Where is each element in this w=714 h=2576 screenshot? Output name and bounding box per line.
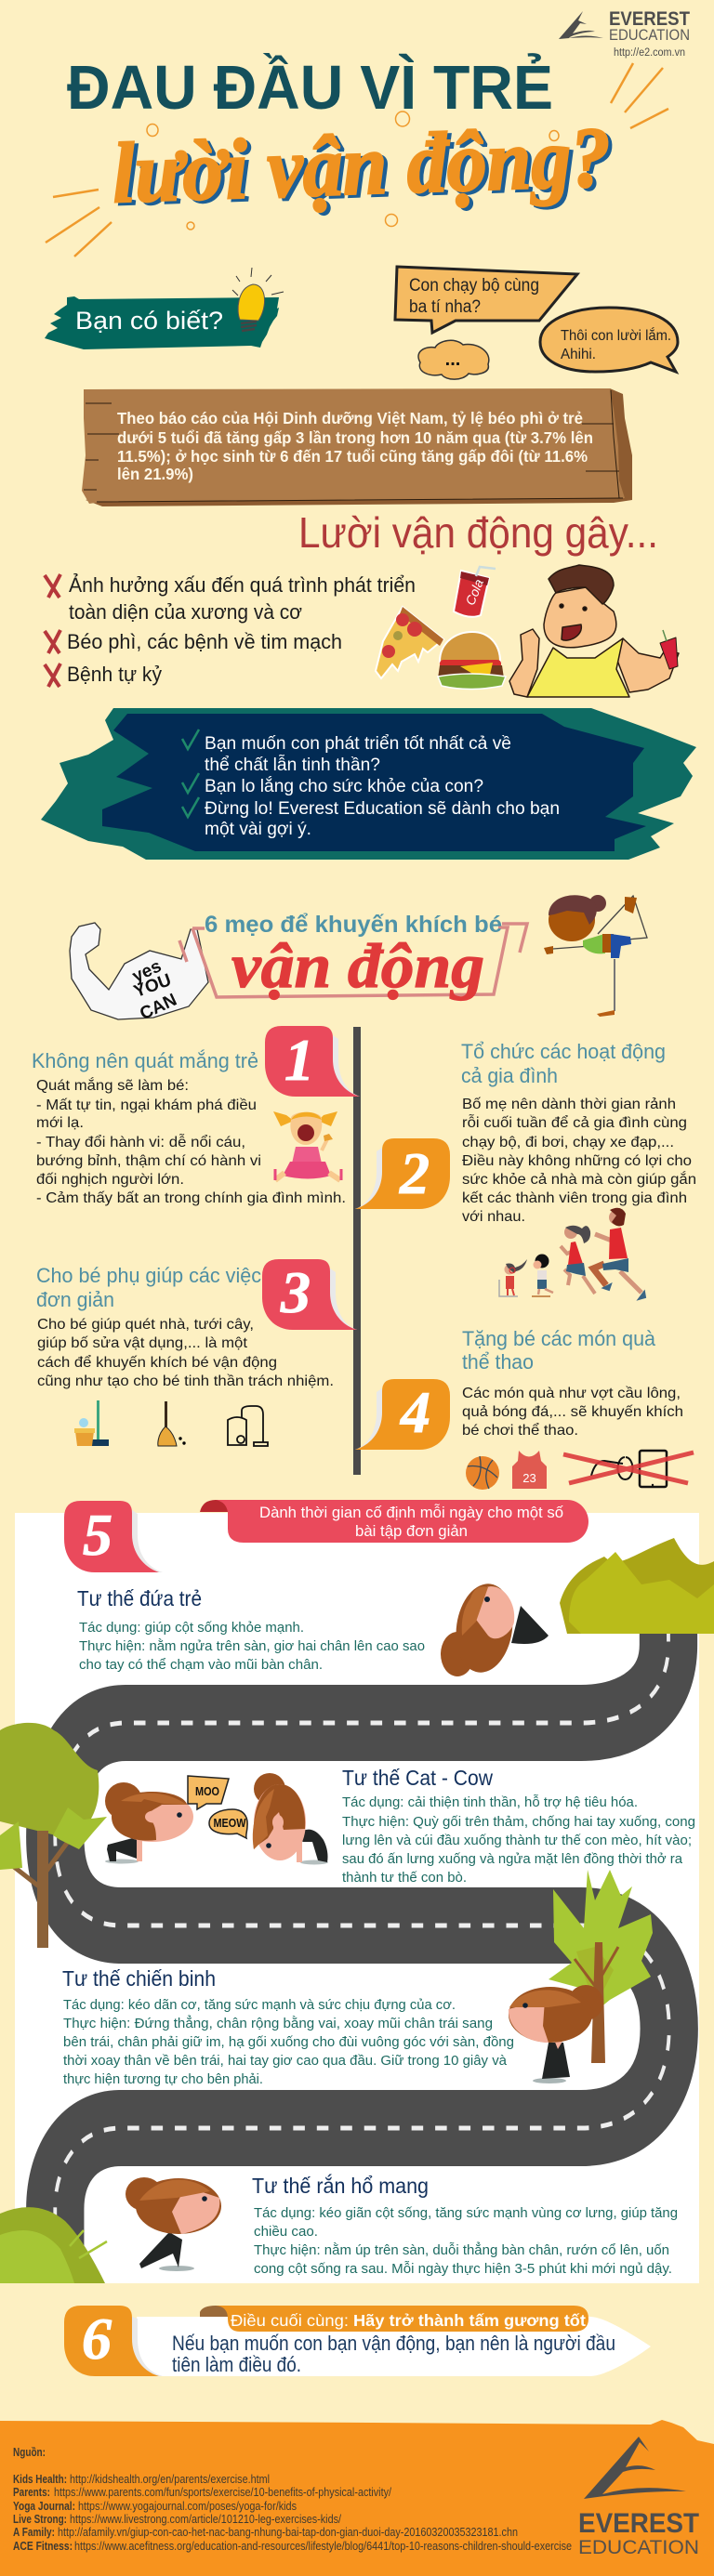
- footer: sources: Nguồn:: [13, 2445, 46, 2459]
- step 1: body text: - Mất tự tin, ngại khám phá điều: [36, 1097, 257, 1113]
- speech bubble: meow: MEOW: [214, 1816, 246, 1830]
- speech bubble: moo: MOO: [195, 1784, 219, 1798]
- step 6: banner: Điều cuối cùng:: [231, 2311, 349, 2330]
- pose 3: heading and text: Tác dụng: kéo dãn cơ, tăng sức mạnh và sức chịu đựng của cơ.: [63, 1997, 456, 2013]
- icon: light bulb: [232, 268, 284, 331]
- road: [55, 1626, 669, 2283]
- step 3: heading: đơn giản: [36, 1288, 114, 1311]
- step 4: heading: Tặng bé các món quà: [462, 1327, 656, 1350]
- step 6: banner: [200, 2306, 588, 2332]
- step 3: body text: cũng như tạo cho bé tinh thần trách nhiệm.: [37, 1373, 334, 1389]
- pose 1: heading and text: Tác dụng: giúp cột sống khỏe mạnh.: [79, 1620, 304, 1636]
- step 6: banner: Hãy trở thành tấm gương tốt: [353, 2311, 586, 2330]
- pose 1: heading and text: Tư thế đứa trẻ: [77, 1586, 202, 1610]
- logo: Everest Education footer: EVEREST: [578, 2508, 699, 2539]
- icon: jersey: [512, 1451, 547, 1489]
- pose 3: heading and text: thời xoay thân về bên trái, hai tay giơ cao qua đầu. Giữ trong 10 giây và: [63, 2053, 508, 2069]
- step 2: body text: với nhau.: [462, 1209, 525, 1225]
- logo: Everest Education footer: [578, 2437, 699, 2558]
- footer: sources: Live Strong:: [13, 2512, 67, 2526]
- icon: broom: [158, 1401, 186, 1446]
- pose 2: cow figure: [105, 1782, 193, 1864]
- pose 3: figure: [509, 1985, 603, 2083]
- speech bubble: lazy reply: Ahihi.: [561, 347, 596, 362]
- step 4: body text: Các món quà như vợt cầu lông,: [462, 1386, 681, 1401]
- list: consequences: Bệnh tự kỷ: [67, 663, 162, 686]
- panel: wooden sign: 11.5%); ở học sinh từ 6 đến 17 tuổi cũng tăng gấp đôi (từ 11.6%: [117, 447, 588, 466]
- step 3: body text: cách để khuyến khích bé vận động: [37, 1354, 277, 1371]
- panel: call-out brush with questions: một vài gợi ý.: [205, 820, 311, 839]
- step 4: badge: [355, 1379, 450, 1450]
- panel: wooden sign: lên 21.9%): [117, 465, 193, 483]
- panel: call-out brush with questions: thể chất lẫn tinh thần?: [205, 755, 380, 775]
- step 1: body text: Quát mắng sẽ làm bé:: [36, 1076, 189, 1094]
- footer: sources: http://afamily.vn/giup-con-cao-het-nac-bang-nhung-bai-tap-don-gian-duoi-day-20160320035323181.chn: [58, 2525, 518, 2539]
- step 5: badge: [64, 1501, 163, 1572]
- illustration: yoga girl: [544, 895, 647, 1017]
- step 1: badge: 1: [284, 1027, 314, 1093]
- step 2: body text: rỗi cuối tuần để cả gia đình cùng: [462, 1113, 687, 1131]
- footer: sources: A Family:: [13, 2525, 55, 2539]
- speech bubble: lazy reply: [540, 308, 678, 372]
- footer: sources: https://www.yogajournal.com/poses/yoga-for/kids: [78, 2499, 297, 2513]
- panel: wooden sign: Theo báo cáo của Hội Dinh dưỡng Việt Nam, tỷ lệ béo phì ở trẻ: [117, 409, 583, 427]
- pose 3: heading and text: Tư thế chiến binh: [62, 1966, 216, 1991]
- step 1: badge: [265, 1026, 360, 1097]
- step 5: banner: Dành thời gian cố định mỗi ngày cho một số: [259, 1504, 564, 1521]
- step 6: badge: [64, 2306, 163, 2376]
- step 6: body text: Nếu bạn muốn con bạn vận động, bạn nên là người đầu: [172, 2332, 615, 2355]
- step 3: body text: giúp bố sửa vật dụng,... là một: [37, 1335, 248, 1351]
- speech bubble: run with dad: Con chạy bộ cùng: [409, 276, 539, 296]
- title line two: script with shadow: lười vận động?: [115, 112, 616, 223]
- step 6: body text: [172, 2332, 615, 2376]
- illustration: crying girl: [273, 1111, 341, 1180]
- step 4: badge: 4: [400, 1379, 430, 1445]
- heading: laziness causes: Lười vận động gây...: [298, 508, 658, 557]
- pose 1: heading and text: Thực hiện: nằm ngửa trên sàn, giơ hai chân lên cao sao: [79, 1638, 425, 1654]
- step 3: body text: Cho bé giúp quét nhà, tưới cây,: [37, 1317, 254, 1333]
- title line two: script with shadow: lười vận động?: [111, 110, 613, 220]
- step 3: heading: Cho bé phụ giúp các việc: [36, 1264, 261, 1287]
- speech bubble: lazy reply: Thôi con lười lắm.: [561, 326, 671, 344]
- footer: sources: https://www.parents.com/fun/sports/exercise/10-benefits-of-physical-activity/: [54, 2485, 391, 2499]
- step 2: body text: kết các thành viên trong gia đình: [462, 1190, 687, 1206]
- title line one: ĐAU ĐẦU VÌ TRẺ: [67, 53, 553, 123]
- callout: did you know brush: [45, 296, 279, 349]
- logo: Everest Education header: http://e2.com.vn: [614, 47, 685, 59]
- step 4: body text: bé chơi thể thao.: [462, 1422, 578, 1439]
- list: consequences: Béo phì, các bệnh về tim mạch: [67, 630, 342, 653]
- logo: Everest Education header: EDUCATION: [609, 26, 690, 44]
- step 4: heading: thể thao: [462, 1350, 534, 1373]
- pose 1: figure: [441, 1580, 549, 1676]
- step 1: body text: bướng bỉnh, thậm chí có hành vi: [36, 1153, 261, 1169]
- step 2: badge: 2: [399, 1140, 430, 1206]
- step 2: heading: Tổ chức các hoạt động: [461, 1040, 666, 1063]
- icon: basketball: [466, 1456, 499, 1490]
- speech bubble: run with dad: ba tí nha?: [409, 297, 481, 317]
- pose 4: heading and text: Tư thế rắn hổ mang: [252, 2174, 429, 2198]
- panel: call-out brush with questions: Bạn lo lắng cho sức khỏe của con?: [205, 776, 483, 796]
- illustration: overweight man eating: [509, 565, 679, 697]
- footer: sources: [13, 2445, 572, 2553]
- thought cloud: ...: [445, 349, 460, 370]
- footer: sources: Kids Health:: [13, 2472, 67, 2486]
- pose 1: heading and text: cho tay có thể chạm vào mũi bàn chân.: [79, 1657, 323, 1673]
- speech bubble: moo: [188, 1776, 229, 1809]
- icon: cola can: Cola: [462, 577, 486, 608]
- icon: jersey: 23: [522, 1471, 536, 1485]
- step 1: body text: [36, 1076, 346, 1206]
- step 2: body text: Bố mẹ nên dành thời gian rảnh: [462, 1097, 676, 1112]
- footer: sources: Yoga Journal:: [13, 2499, 75, 2513]
- pose 2: cat figure: [253, 1773, 328, 1864]
- list: consequences: Ảnh hưởng xấu đến quá trình phát triển: [69, 573, 416, 597]
- pose 2: heading and text: Tư thế Cat - Cow: [342, 1766, 493, 1790]
- step 2: heading: [461, 1040, 666, 1087]
- heading: six tips frame: [179, 912, 527, 1001]
- step 5: badge: 5: [83, 1502, 112, 1568]
- step 5: banner: [200, 1500, 588, 1543]
- step 6: white arrow panel: [137, 2317, 651, 2376]
- speech bubble: run with dad: [395, 267, 577, 333]
- pose 2: heading and text: Thực hiện: Quỳ gối trên thảm, chống hai tay xuống, cong: [342, 1814, 695, 1830]
- panel: section 5 white background: [15, 1513, 699, 2283]
- pose 2: heading and text: sau đó ấn lưng xuống và ngửa mặt lên đồng thời thở ra: [342, 1851, 683, 1867]
- step 6: body text: tiên làm điều đó.: [172, 2353, 301, 2376]
- illustration: running family: [499, 1208, 645, 1299]
- pose 1: heading and text: [77, 1586, 425, 1673]
- pose 4: heading and text: [252, 2174, 678, 2277]
- step 5: banner: bài tập đơn giản: [355, 1522, 468, 1540]
- logo: Everest Education header: [559, 8, 690, 59]
- tree: bush top right: [560, 1538, 714, 1634]
- pose 4: heading and text: cong cột sống ra sau. Mỗi ngày thực hiện 3-5 phút khi mới ngủ dậy.: [254, 2261, 672, 2277]
- heading: six tips frame: vận động: [231, 930, 484, 1001]
- tree: middle right: [549, 1870, 653, 2063]
- step 1: body text: mới lạ.: [36, 1115, 84, 1131]
- panel: call-out brush with questions: Đừng lo! Everest Education sẽ dành cho bạn: [205, 799, 560, 819]
- step 4: body text: quả bóng đá,... sẽ khuyến khích: [462, 1404, 683, 1420]
- logo: Everest Education header: EVEREST: [609, 8, 690, 30]
- thought cloud: [418, 340, 489, 379]
- step 1: body text: đối nghịch người lớn.: [36, 1172, 184, 1188]
- step 6: badge: 6: [82, 2306, 112, 2372]
- panel: call-out brush with questions: [41, 708, 696, 860]
- step 2: body text: [462, 1097, 696, 1225]
- icon: cola can: [454, 567, 496, 617]
- speech bubble: meow: [209, 1809, 247, 1838]
- panel: wooden sign: [82, 388, 632, 506]
- illustration: yes you can arm: yes: [129, 956, 165, 987]
- tree: bottom left bush: [0, 2207, 107, 2283]
- step 1: body text: - Cảm thấy bất an trong chính gia đình mình.: [36, 1190, 346, 1206]
- pose 3: heading and text: [62, 1966, 514, 2087]
- list: consequences: toàn diện của xương và cơ: [69, 600, 302, 624]
- title decoration: rays and circles: [46, 63, 668, 256]
- step 2: body text: chạy bộ, đi bơi, chạy xe đạp,...: [462, 1135, 674, 1150]
- step 2: body text: Điều này không những có lợi cho: [462, 1153, 692, 1169]
- step 2: body text: sức khỏe cả nhà mà còn giúp gắn: [462, 1170, 696, 1188]
- panel: call-out brush with questions: Bạn muốn con phát triển tốt nhất cả về: [205, 734, 511, 754]
- step 3: badge: [262, 1259, 357, 1330]
- panel: wooden sign: dưới 5 tuổi đã tăng gấp 3 lần trong hơn 10 năm qua (từ 3.7% lên: [117, 428, 593, 447]
- footer: sources: http://kidshealth.org/en/parents/exercise.html: [70, 2472, 270, 2486]
- step 2: badge: [355, 1138, 450, 1209]
- step 1: heading: Không nên quát mắng trẻ: [32, 1049, 258, 1072]
- pose 4: heading and text: chiều cao.: [254, 2224, 318, 2240]
- icon: pizza slice: [376, 607, 443, 678]
- step 4: body text: [462, 1386, 683, 1439]
- step 3: heading: [36, 1264, 261, 1311]
- timeline bar: [353, 1027, 361, 1475]
- step 3: badge: 3: [280, 1259, 311, 1325]
- footer: sources: https://www.livestrong.com/article/101210-leg-exercises-kids/: [70, 2512, 341, 2526]
- footer: sources: https://www.acefitness.org/education-and-resources/lifestyle/blog/6441/top-10-reasons-children-should-exercise: [74, 2539, 572, 2553]
- step 3: body text: [37, 1317, 334, 1389]
- pose 4: heading and text: Thực hiện: nằm úp trên sàn, duỗi thẳng bàn chân, rướn cổ lên, uốn: [254, 2241, 669, 2258]
- pose 4: figure: [126, 2177, 221, 2271]
- pose 3: heading and text: Thực hiện: Đứng thẳng, chân rộng bằng vai, xoay mũi chân trái sang: [63, 2015, 493, 2031]
- pose 2: heading and text: Tác dụng: cải thiện tinh thần, hỗ trợ hệ tiêu hóa.: [342, 1794, 638, 1810]
- tree: left: [0, 1723, 107, 1948]
- illustration: yes you can arm: YOU: [131, 970, 174, 1002]
- footer: sources: Parents:: [13, 2485, 50, 2499]
- logo: Everest Education footer: EDUCATION: [578, 2537, 699, 2558]
- pose 2: heading and text: [342, 1766, 695, 1886]
- step 2: heading: cả gia đình: [461, 1064, 558, 1087]
- illustration: yes you can arm: CAN: [137, 991, 180, 1024]
- pose 3: heading and text: thực hiện tương tự cho bên phải.: [63, 2071, 263, 2087]
- pose 2: heading and text: thành tư thế con bò.: [342, 1870, 467, 1886]
- footer: sources: ACE Fitness:: [13, 2539, 73, 2553]
- icon: vacuum cleaner: [228, 1406, 268, 1446]
- panel: footer: [0, 2420, 714, 2576]
- icon: mop and bucket: [74, 1400, 109, 1446]
- pose 2: heading and text: lưng lên và cúi đầu xuống thành tư thế con mèo, hít vào;: [342, 1833, 692, 1848]
- pose 3: heading and text: bên trái, chân phải giữ im, hạ gối xuống cho đùi vuông góc với sàn, đồng: [63, 2034, 514, 2050]
- icon: crossed gadgets: [563, 1451, 694, 1487]
- callout: did you know brush: Bạn có biết?: [75, 307, 223, 335]
- step 4: heading: [462, 1327, 656, 1373]
- heading: six tips frame: 6 mẹo để khuyến khích bé: [205, 912, 502, 938]
- list: consequences: [45, 573, 416, 687]
- step 1: body text: - Thay đổi hành vi: dễ nổi cáu,: [36, 1133, 245, 1150]
- illustration: yes you can arm: [70, 923, 208, 1024]
- icon: burger: [438, 632, 506, 690]
- pose 4: heading and text: Tác dụng: kéo giãn cột sống, tăng sức mạnh vùng cơ lưng, giúp tăng: [254, 2205, 678, 2221]
